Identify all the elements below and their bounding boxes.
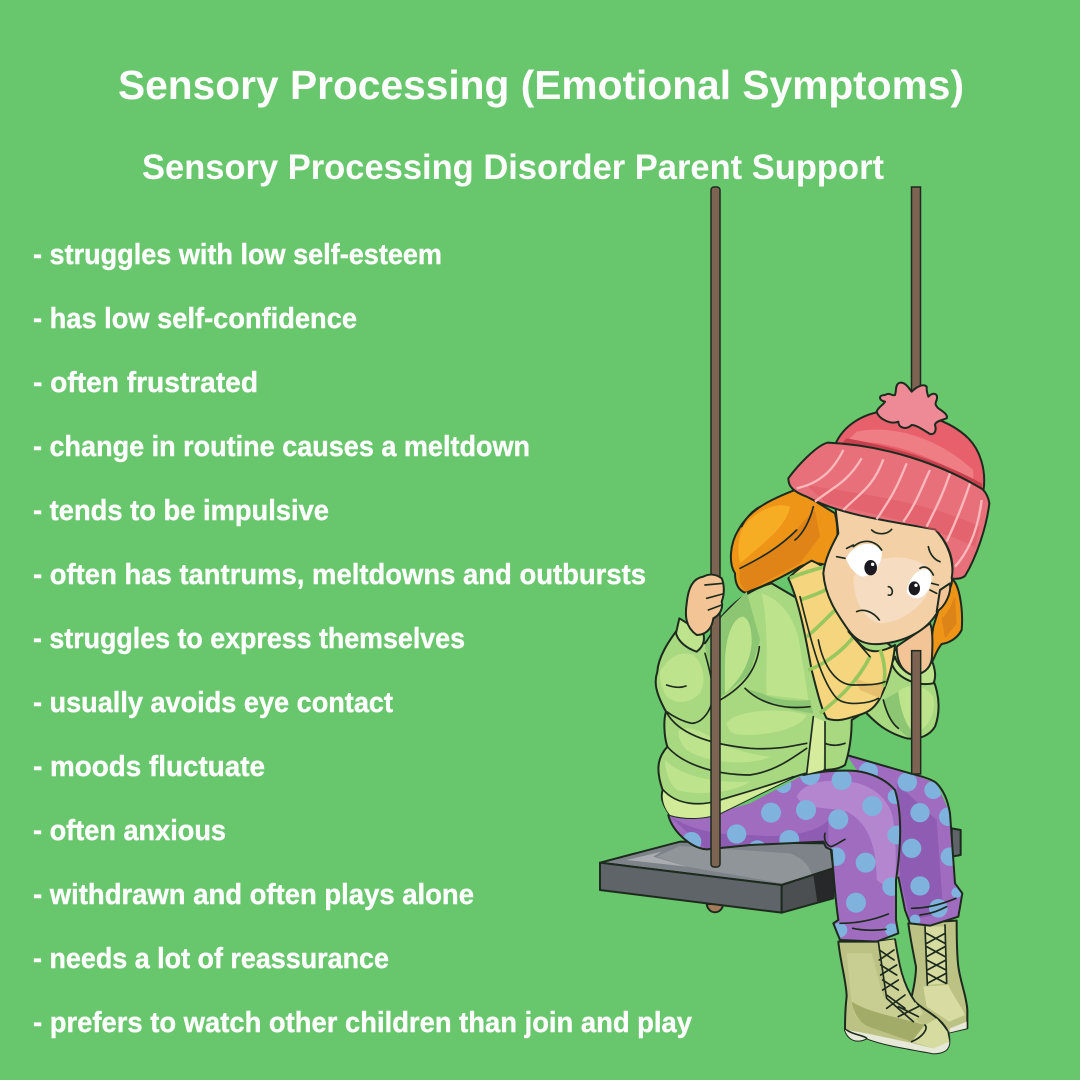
hair behind the girl — [731, 489, 962, 661]
right cuff — [892, 657, 935, 684]
swing rope: right, upper section — [912, 187, 920, 397]
near trouser leg — [663, 765, 906, 947]
jacket silhouette — [656, 583, 939, 818]
hand — [686, 575, 724, 635]
hat brim — [788, 443, 989, 579]
subtitle: Sensory Processing Disorder Parent Support — [142, 148, 884, 187]
symptom list: - often anxious — [33, 815, 226, 847]
far boot — [908, 921, 967, 1033]
symptom list: - withdrawn and often plays alone — [33, 879, 474, 911]
jacket creases — [663, 647, 898, 804]
jacket — [656, 583, 939, 818]
symptom list: - needs a lot of reassurance — [33, 943, 389, 975]
brows, nose, mouth — [837, 529, 940, 620]
symptom list: - struggles with low self-esteem — [33, 239, 442, 271]
right hand, cuff and rope — [892, 623, 935, 774]
hat crown — [835, 411, 984, 492]
jacket zip strip — [807, 717, 825, 774]
face — [823, 503, 953, 644]
pupils — [864, 560, 877, 575]
symptom list: - tends to be impulsive — [33, 495, 329, 527]
left hand and cuff — [676, 575, 724, 652]
ear — [937, 583, 950, 612]
title: Sensory Processing (Emotional Symptoms) — [118, 62, 964, 108]
symptom list: - prefers to watch other children than join and play — [33, 1007, 692, 1039]
head — [788, 383, 989, 644]
swing seat — [600, 828, 961, 913]
symptom list: - often has tantrums, meltdowns and outbursts — [33, 559, 646, 591]
symptom list — [33, 239, 692, 1039]
eyes — [846, 544, 882, 577]
far leg and boot — [847, 755, 967, 1033]
jacket shading — [660, 592, 934, 818]
symptom list: - change in routine causes a meltdown — [33, 431, 530, 463]
symptom list: - has low self-confidence — [33, 303, 357, 335]
symptom list: - often frustrated — [33, 367, 258, 399]
right hand — [897, 623, 932, 675]
scarf — [788, 561, 895, 720]
symptom list: - usually avoids eye contact — [33, 687, 393, 719]
symptom list: - moods fluctuate — [33, 751, 265, 783]
far trouser leg — [847, 755, 962, 926]
illustration: girl on a swing — [600, 187, 989, 1053]
symptom list: - struggles to express themselves — [33, 623, 465, 655]
cuff — [676, 618, 704, 652]
near boot — [838, 939, 949, 1053]
swing rope: left — [711, 187, 720, 867]
swing rope: right, lower section — [912, 651, 921, 774]
pompom — [877, 383, 947, 434]
